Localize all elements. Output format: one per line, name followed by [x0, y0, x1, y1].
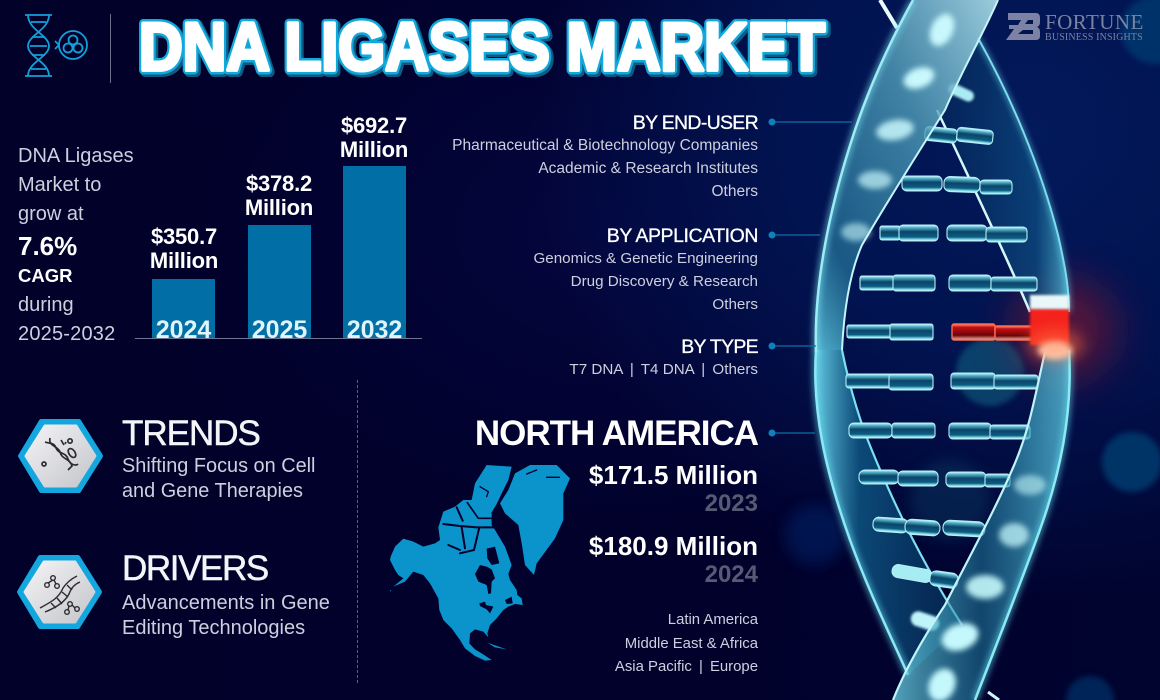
CAGR text block: 2025-2032: [18, 323, 115, 345]
list: [452, 137, 758, 200]
bar 2025: 2025: [252, 316, 307, 344]
icon: trends hexagon: [18, 419, 103, 493]
year: 2023: [705, 490, 758, 517]
CAGR text block: [18, 145, 134, 345]
heading: BY END-USER: [633, 112, 758, 134]
trends text: and Gene Therapies: [122, 480, 303, 502]
ribbon blobs lower: [923, 475, 1046, 700]
chart baseline: [135, 338, 422, 339]
value 2025: [245, 171, 313, 220]
icon: drivers hexagon: [17, 555, 102, 629]
list: Drug Discovery & Research: [571, 273, 758, 290]
CAGR text block: DNA Ligases: [18, 145, 134, 167]
value: $180.9 Million: [589, 531, 758, 561]
header divider: [110, 14, 111, 83]
bokeh lights: [785, 0, 1160, 700]
list: T7 DNA | T4 DNA | Others: [569, 361, 758, 378]
segment: by type: [569, 336, 758, 378]
list: Others: [712, 296, 758, 313]
bar chart: [135, 113, 422, 344]
drivers heading: DRIVERS: [122, 549, 268, 588]
value 2024: $350.7: [151, 224, 217, 249]
red damage band: [1027, 295, 1083, 361]
drivers block: [17, 549, 330, 638]
value 2025: Million: [245, 195, 313, 220]
logo mark: [1006, 13, 1040, 40]
value 2032: [340, 113, 408, 162]
segment: by end-user: [452, 112, 758, 200]
CAGR text block: 7.6%: [18, 231, 77, 261]
bar 2032: [343, 166, 406, 338]
value 2032: Million: [340, 137, 408, 162]
back ribbon lower left: [815, 350, 999, 700]
dashed separator: [357, 380, 358, 683]
rungs: [846, 83, 1038, 632]
other regions list: Asia Pacific | Europe: [615, 659, 758, 675]
value 2024: [150, 224, 218, 273]
other regions list: Middle East & Africa: [625, 636, 758, 652]
other regions list: Latin America: [668, 612, 758, 628]
year: 2024: [705, 561, 758, 588]
CAGR text block: CAGR: [18, 265, 72, 286]
heading: BY TYPE: [681, 336, 758, 358]
drivers text: Editing Technologies: [122, 616, 305, 638]
list: Genomics & Genetic Engineering: [533, 250, 758, 267]
list: Others: [711, 183, 758, 200]
brand logo: [1006, 10, 1144, 43]
value 2025: $378.2: [246, 171, 312, 196]
list: Academic & Research Institutes: [538, 160, 758, 177]
map: North America: [390, 465, 570, 661]
list: [533, 250, 758, 313]
north america 2023 value: [589, 460, 758, 517]
front ribbon upper: [816, 0, 998, 352]
value 2024: Million: [150, 248, 218, 273]
front ribbon lower: [893, 350, 1070, 700]
header icon: DNA and cells: [25, 14, 88, 77]
list: Pharmaceutical & Biotechnology Companies: [452, 137, 758, 154]
trends text: [122, 455, 315, 502]
back ribbon upper right: [880, 0, 1069, 312]
trends block: [18, 414, 315, 502]
CAGR text block: during: [18, 294, 74, 316]
heading: BY APPLICATION: [607, 225, 758, 247]
bar 2024: [152, 279, 215, 338]
value: $171.5 Million: [589, 460, 758, 490]
CAGR text block: grow at: [18, 203, 84, 225]
north america 2024 value: [589, 531, 758, 588]
segment: by application: [533, 225, 758, 313]
drivers text: [122, 592, 330, 638]
ribbon blobs upper: [841, 10, 959, 241]
CAGR text block: Market to: [18, 174, 101, 196]
bar 2024: 2024: [156, 316, 211, 344]
drivers text: Advancements in Gene: [122, 592, 330, 614]
other regions list: [614, 612, 758, 675]
trends text: Shifting Focus on Cell: [122, 455, 315, 477]
trends heading: TRENDS: [122, 414, 260, 453]
value 2032: $692.7: [341, 113, 407, 138]
logo wordmark: BUSINESS INSIGHTS: [1045, 32, 1143, 43]
logo wordmark: FORTUNE: [1045, 10, 1144, 34]
bar 2032: 2032: [347, 316, 402, 344]
bar 2025: [248, 225, 311, 338]
red rung: [952, 324, 1038, 340]
north america heading: NORTH AMERICA: [475, 414, 758, 453]
